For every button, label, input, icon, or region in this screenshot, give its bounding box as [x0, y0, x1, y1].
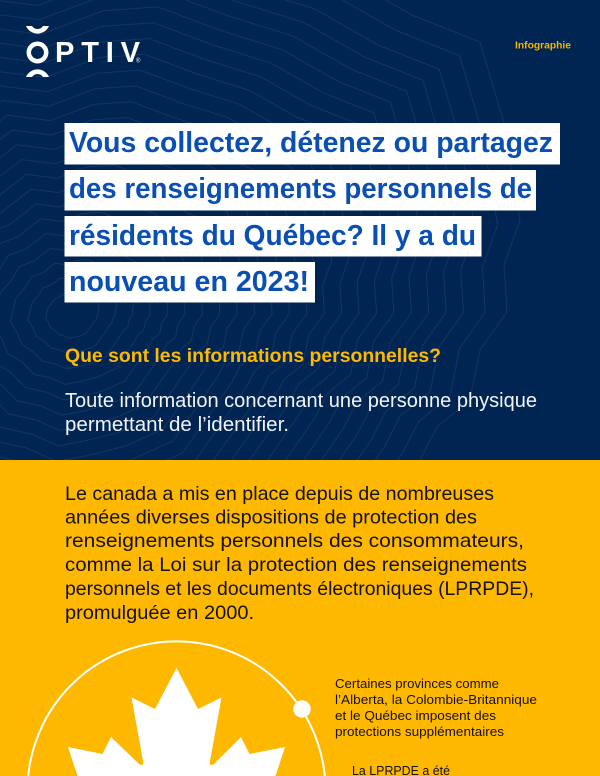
text block: Canadian legislation: renseignements personnels des consommateurs, [65, 530, 524, 552]
title: Vous collectez, détenez ou partagez [69, 127, 553, 159]
logo: Optiv: ® [136, 58, 141, 64]
text block: Canadian legislation: comme la Loi sur la protection des renseignements [65, 554, 527, 576]
text block: Canadian legislation: Le canada a mis en place depuis de nombreuses [65, 483, 494, 505]
title: résidents du Québec? Il y a du [69, 220, 476, 252]
title: nouveau en 2023! [69, 266, 309, 298]
title: des renseignements personnels de [69, 173, 532, 205]
text block: provinces: Certaines provinces comme [335, 676, 499, 691]
panel: yellow section background [0, 460, 600, 776]
title [64, 123, 560, 302]
panel: navy header background [0, 0, 600, 460]
icon: maple leaf [68, 668, 285, 776]
text block: Canadian legislation: personnels et les documents électroniques (LPRPDE), [65, 578, 534, 600]
text block: provinces: l’Alberta, la Colombie-Britannique [335, 692, 537, 707]
text block: definition [65, 390, 537, 436]
text block: definition: permettant de l’identifier. [65, 414, 289, 436]
timeline dot [293, 700, 311, 718]
heading: personal information: Que sont les informations personnelles? [65, 346, 441, 367]
text block: Canadian legislation: années diverses dispositions de protection des [65, 506, 477, 528]
text block: provinces: et le Québec imposent des [335, 708, 497, 723]
text block: Canadian legislation [65, 483, 534, 624]
text block: Canadian legislation: promulguée en 2000. [65, 602, 254, 624]
timeline circle [28, 641, 325, 776]
label: Infographie: Infographie [515, 40, 571, 52]
text block: definition: Toute information concernant une personne physique [65, 390, 537, 412]
logo: Optiv: PTIV [55, 37, 141, 69]
logo: Optiv [26, 26, 141, 77]
text block: provinces: protections supplémentaires [335, 724, 505, 739]
text block: provinces [335, 676, 537, 739]
